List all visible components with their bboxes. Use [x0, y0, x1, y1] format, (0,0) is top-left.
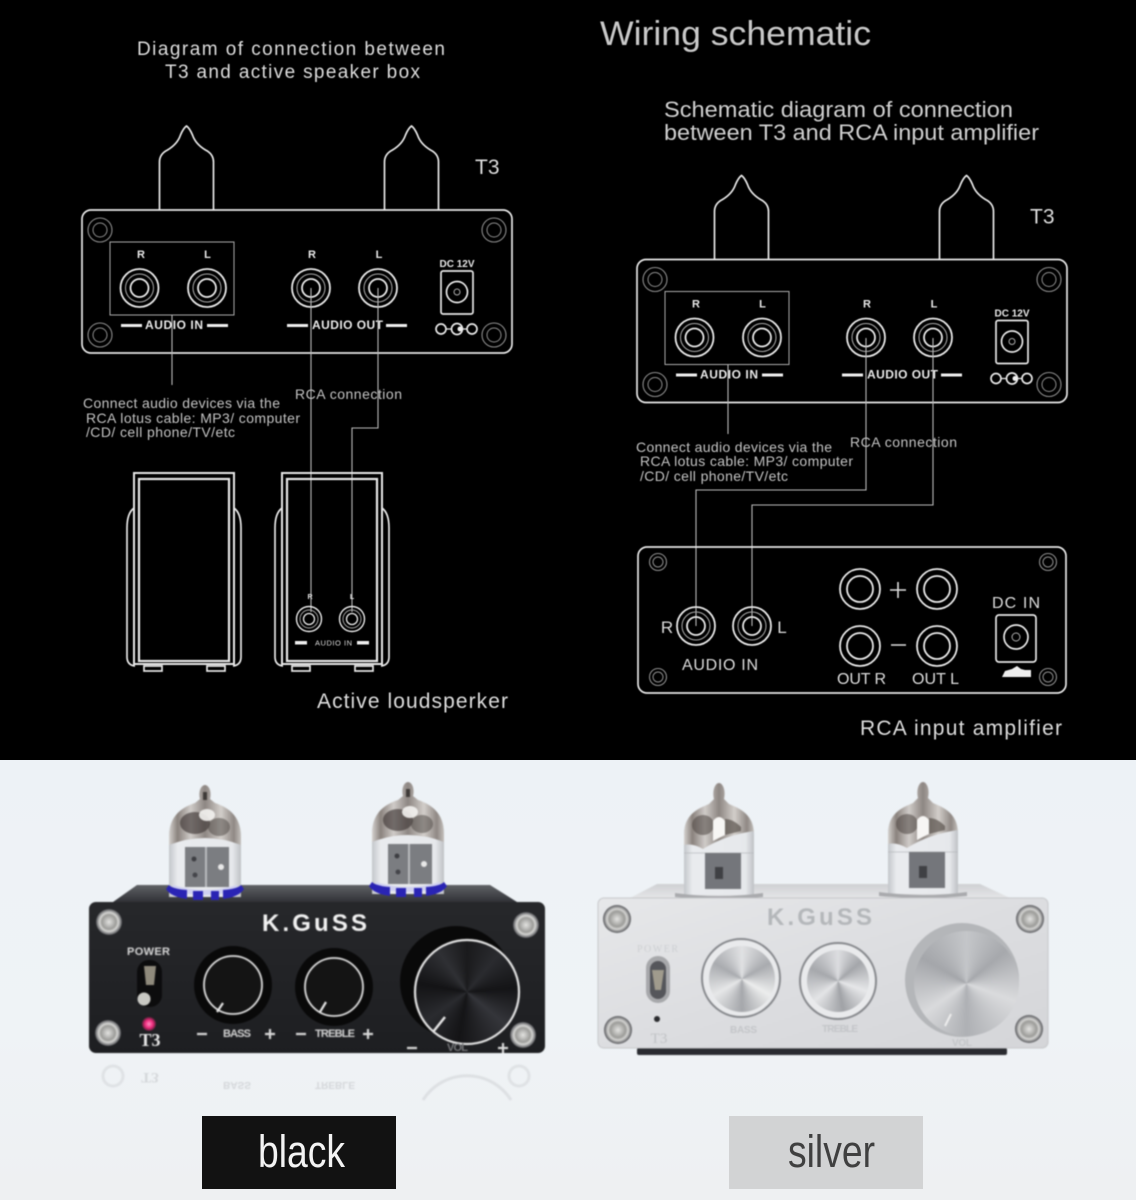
wires: left diagram: [172, 288, 378, 612]
knob labels: BASS: [223, 1028, 251, 1040]
diagram: T3 rear panel, left: [82, 126, 512, 353]
audio in group: R: [137, 249, 145, 261]
heading: RCA amplifier diagram: [664, 97, 1039, 145]
knob labels: VOL: [952, 1038, 972, 1049]
wires: right diagram: [696, 338, 933, 626]
power LED: [654, 1016, 660, 1022]
DC input: [992, 595, 1040, 677]
background: black schematic area: [0, 0, 1136, 760]
icon: corner screws: [88, 218, 506, 347]
reflection: TREBLE: [315, 1079, 355, 1090]
audio out group: R: [308, 249, 316, 261]
panel outline: [638, 547, 1066, 693]
power switch and label: [127, 946, 170, 1007]
knob: treble: [295, 948, 373, 1026]
label: RCA input amplifier: RCA input amplifier: [860, 717, 1062, 740]
audio out group: AUDIO OUT: [867, 368, 939, 382]
power LED: [142, 1017, 156, 1031]
DC 12V input: [436, 259, 477, 334]
text: audio device note, left: [83, 395, 300, 440]
top cover: [630, 884, 1010, 898]
text: audio device note, left: /CD/ cell phone/TV/etc: [86, 424, 235, 440]
reflection: [103, 1066, 529, 1100]
audio out group: AUDIO OUT: [312, 318, 384, 332]
icon: vacuum tubes: [166, 782, 447, 900]
model T3: T3: [139, 1030, 161, 1050]
audio in group: L: [204, 249, 211, 261]
icon: corner screws: [650, 554, 1056, 686]
icon: vacuum tubes: [675, 782, 967, 899]
swatch: silver: [729, 1116, 923, 1189]
audio inputs: R: [661, 618, 673, 637]
icon: vacuum tube outlines: [160, 126, 438, 210]
label: T3: T3: [475, 156, 500, 179]
diagram: RCA input amplifier panel: [638, 547, 1066, 693]
DC 12V input: DC 12V: [994, 308, 1030, 320]
icon: speaker with audio inputs: L: [350, 594, 355, 601]
panel outline: [82, 210, 512, 353]
DC 12V input: [991, 308, 1032, 384]
text: audio device note, left: Connect audio devices via the: [83, 395, 280, 411]
power switch and label: POWER: [637, 944, 678, 955]
audio out group: R: [863, 298, 871, 310]
swatch: black: black: [258, 1126, 345, 1177]
brand: K.GuSS: [262, 910, 367, 937]
text: audio device note, right: /CD/ cell phone/TV/etc: [640, 468, 788, 484]
knob labels: TREBLE: [822, 1024, 858, 1035]
front panel: [89, 902, 545, 1053]
brand: K.GuSS: [767, 904, 872, 931]
text: RCA connection, left: RCA connection: [295, 386, 402, 402]
reflection: BASS: [223, 1079, 251, 1090]
front panel: [598, 898, 1048, 1048]
text: audio device note, right: RCA lotus cable: MP3/ computer: [640, 453, 853, 469]
knob labels: VOL: [447, 1042, 468, 1054]
label: T3: T3: [1030, 206, 1055, 228]
audio out group: L: [931, 298, 938, 310]
knob labels: BASS: [730, 1025, 757, 1036]
audio in group: [110, 242, 234, 332]
diagram: T3 rear panel, right: [637, 176, 1067, 402]
background: light product area: [0, 760, 1136, 1200]
text: audio device note, right: [636, 439, 853, 484]
product: black amplifier: [89, 782, 545, 1100]
swatch: silver: silver: [788, 1126, 875, 1177]
heading: active speaker diagram: T3 and active speaker box: [165, 62, 420, 83]
knob labels: TREBLE: [315, 1028, 355, 1040]
icon: speaker, plain side: [127, 473, 241, 671]
heading: active speaker diagram: [137, 39, 445, 83]
audio in group: AUDIO IN: [145, 318, 203, 332]
DC 12V input: DC 12V: [439, 259, 475, 270]
icon: corner screws: [643, 268, 1061, 396]
audio in group: AUDIO IN: [700, 368, 758, 382]
knob: treble: [800, 943, 876, 1019]
knob: volume: [905, 923, 1019, 1037]
reflection: T3: [141, 1069, 159, 1085]
model T3: T3: [651, 1031, 667, 1047]
swatch: black: [202, 1116, 396, 1189]
heading: active speaker diagram: Diagram of connection between: [137, 39, 445, 60]
audio out group: L: [376, 249, 383, 261]
icon: speaker with audio inputs: [275, 473, 389, 671]
heading: RCA amplifier diagram: between T3 and RCA input amplifier: [664, 120, 1039, 145]
audio inputs: AUDIO IN: [682, 657, 758, 674]
audio out group: [842, 298, 962, 382]
text: audio device note, left: RCA lotus cable: MP3/ computer: [86, 410, 300, 426]
text: RCA connection, right: RCA connection: [850, 434, 957, 450]
knob labels: [197, 1028, 508, 1054]
DC input: DC IN: [992, 595, 1040, 612]
top cover: [113, 885, 517, 902]
label: active loudspeaker: Active loudsperker: [317, 690, 508, 713]
heading: RCA amplifier diagram: Schematic diagram of connection: [664, 97, 1013, 122]
icon: vacuum tube outlines: [714, 176, 994, 260]
speaker outputs: OUT L: [912, 671, 959, 688]
audio out group: [287, 249, 407, 332]
icon: panel screws: [95, 909, 539, 1048]
audio inputs: [661, 607, 787, 674]
speaker outputs: OUT R: [837, 671, 886, 688]
panel outline: [637, 260, 1067, 402]
knob: bass: [702, 939, 780, 1017]
audio inputs: L: [777, 618, 787, 637]
audio in group: R: [692, 298, 700, 310]
title: wiring schematic: Wiring schematic: [600, 15, 871, 53]
under shadow: [637, 1048, 1007, 1055]
power switch and label: POWER: [127, 946, 170, 958]
icon: speaker with audio inputs: AUDIO IN: [315, 638, 352, 648]
knob: bass: [194, 946, 272, 1024]
text: audio device note, right: Connect audio devices via the: [636, 439, 832, 455]
icon: speaker with audio inputs: R: [307, 594, 313, 601]
knob labels: [730, 1024, 972, 1049]
knob: volume: [400, 926, 519, 1044]
power switch and label: [637, 944, 678, 1003]
audio in group: L: [759, 298, 766, 310]
product: silver amplifier: [598, 782, 1048, 1055]
speaker outputs: [837, 569, 959, 688]
schematic layer: [82, 15, 1067, 740]
audio in group: [665, 292, 789, 382]
icon: panel screws: [603, 905, 1044, 1044]
